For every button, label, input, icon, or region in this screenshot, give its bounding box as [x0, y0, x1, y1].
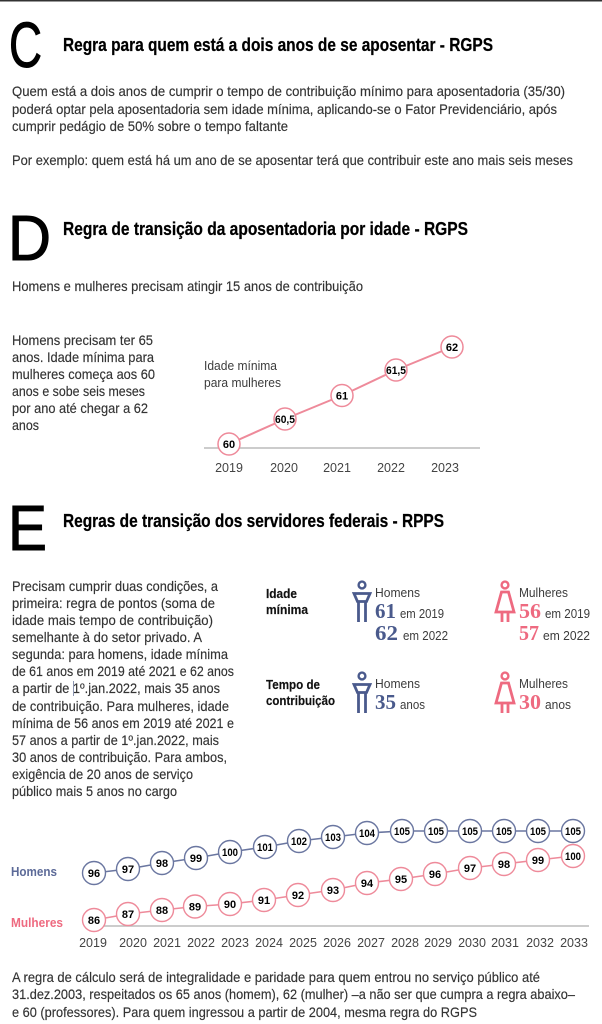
text block E: 57 anos a partir de 1º.jan.2022, mais — [12, 732, 219, 748]
series: mulheres: 96 — [429, 869, 441, 881]
text block E: de contribuição. Para mulheres, idade — [12, 698, 229, 714]
stats: homens idade — [375, 585, 448, 645]
series: homens: 101 — [257, 842, 273, 854]
text block D — [12, 332, 155, 433]
text block E: a partir de 1º.jan.2022, mais 35 anos — [12, 680, 220, 696]
stats: homens idade: Homens — [375, 585, 420, 600]
stats: homens contribuição: Homens — [375, 676, 420, 691]
row label: idade mínima: mínima — [266, 603, 309, 617]
stats: mulheres idade: 56 — [519, 599, 541, 623]
series: mulheres: 89 — [189, 902, 201, 914]
series: homens: 102 — [291, 836, 307, 848]
series: mulheres — [82, 844, 584, 932]
year axis labels: 2031 — [491, 936, 519, 950]
row label: tempo de contribuição: contribuição — [266, 694, 335, 708]
series: homens: 105 — [462, 826, 478, 838]
series: homens: 105 — [496, 826, 512, 838]
row label: idade mínima — [266, 587, 309, 617]
text block D: Homens precisam ter 65 — [12, 332, 153, 348]
series: mulheres: 95 — [395, 874, 407, 886]
series: mulheres: 94 — [361, 878, 374, 890]
text block C: Quem está a dois anos de cumprir o tempo de contribuição mínimo para aposentadoria (35/30) — [12, 83, 565, 99]
text block E — [12, 578, 234, 799]
series: mulheres: 99 — [532, 855, 544, 867]
line chart: idade mínima para mulheres: 2022 — [377, 461, 405, 475]
series: homens: 105 — [530, 826, 546, 838]
line chart: idade mínima para mulheres: 61,5 — [386, 365, 406, 377]
stats: homens idade: 62 — [375, 621, 398, 645]
year axis labels: 2033 — [560, 936, 588, 950]
text block C: cumprir pedágio de 50% sobre o tempo faltante — [12, 118, 288, 134]
series: homens: 104 — [359, 828, 376, 840]
series: mulheres: 88 — [156, 905, 168, 917]
text block D: anos — [12, 417, 39, 433]
text block E: público mais 5 anos no cargo — [12, 783, 177, 799]
series label: homens: Homens — [11, 865, 57, 879]
line chart: regra de pontos — [11, 820, 589, 950]
text block E: Precisam cumprir duas condições, a — [12, 578, 218, 594]
text block E: segunda: para homens, idade mínima — [12, 646, 228, 662]
series: mulheres: 100 — [565, 851, 581, 863]
text block: regra de cálculo: A regra de cálculo será de integralidade e paridade para quem entrou no serviço público até — [12, 969, 540, 985]
series: homens — [82, 820, 584, 884]
year axis labels: 2028 — [391, 936, 419, 950]
icon: mulher contribuição — [496, 673, 514, 713]
series: mulheres: 98 — [498, 859, 510, 871]
line chart: idade mínima para mulheres: 2020 — [270, 461, 298, 475]
year axis labels: 2020 — [119, 936, 147, 950]
stats: homens contribuição — [375, 676, 425, 714]
line chart: idade mínima para mulheres: 60 — [223, 439, 235, 451]
series: homens: 98 — [156, 858, 168, 870]
letter D: D — [8, 202, 51, 274]
text block E: semelhante à do setor privado. A — [12, 629, 203, 645]
heading C: Regra para quem está a dois anos de se aposentar - RGPS — [63, 35, 493, 55]
line chart: idade mínima para mulheres: 2019 — [215, 461, 243, 475]
series: mulheres: 86 — [88, 915, 100, 927]
stats: mulheres contribuição: anos — [545, 697, 571, 712]
icon: homem contribuição — [354, 673, 370, 713]
year axis labels: 2025 — [289, 936, 317, 950]
series: mulheres: 92 — [292, 890, 304, 902]
stats: mulheres contribuição — [519, 676, 571, 714]
year axis labels: 2027 — [357, 936, 385, 950]
text block: regra de cálculo: e 60 (professores). Para quem ingressou a partir de 2004, mesma regra do RGPS — [12, 1004, 477, 1020]
stats: mulheres idade: em 2022 — [543, 628, 590, 643]
year axis labels: 2022 — [187, 936, 215, 950]
line chart: idade mínima para mulheres: 62 — [446, 342, 458, 354]
text block E: mínima de 56 anos em 2019 até 2021 e — [12, 715, 234, 731]
year axis labels: 2021 — [153, 936, 181, 950]
panel: section C — [9, 9, 573, 168]
series: homens: 105 — [565, 826, 581, 838]
chart label — [204, 358, 281, 390]
series: homens: 100 — [222, 847, 238, 859]
series: mulheres: 87 — [122, 909, 134, 921]
year axis labels: 2023 — [221, 936, 249, 950]
year axis labels: 2026 — [323, 936, 351, 950]
series label: mulheres: Mulheres — [11, 916, 63, 930]
stats: mulheres idade: em 2019 — [545, 606, 590, 621]
heading D: Regra de transição da aposentadoria por idade - RGPS — [63, 219, 468, 239]
series: homens: 96 — [88, 868, 100, 880]
text block D: por ano até chegar a 62 — [12, 400, 148, 416]
intro D: Homens e mulheres precisam atingir 15 anos de contribuição — [12, 278, 363, 294]
text block E: exigência de 20 anos de serviço — [12, 766, 193, 782]
year axis labels: 2030 — [458, 936, 486, 950]
icon: mulher idade — [496, 582, 514, 622]
series: mulheres: 93 — [327, 885, 339, 897]
text block D: anos. Idade mínima para — [12, 349, 154, 365]
chart label: para mulheres — [204, 375, 281, 390]
series: homens: 105 — [428, 826, 444, 838]
text block D: mulheres começa aos 60 — [12, 366, 155, 382]
text block C: Por exemplo: quem está há um ano de se aposentar terá que contribuir este ano mais seis meses — [12, 152, 573, 168]
heading E: Regras de transição dos servidores federais - RPPS — [63, 511, 444, 531]
letter C: C — [9, 9, 42, 81]
line chart: idade mínima para mulheres — [204, 336, 480, 475]
text block E: primeira: regra de pontos (soma de — [12, 595, 215, 611]
text cursor mark — [73, 681, 74, 696]
stats: homens idade: em 2022 — [403, 628, 448, 643]
year axis labels — [79, 936, 588, 950]
text block D: anos e sobe seis meses — [12, 383, 145, 399]
panel: section D — [8, 202, 480, 475]
series: homens: 99 — [190, 853, 202, 865]
stats: homens idade: 61 — [375, 599, 396, 623]
stats: mulheres contribuição: Mulheres — [519, 676, 568, 691]
year axis labels: 2032 — [526, 936, 554, 950]
text block E: idade mais tempo de contribuição) — [12, 612, 213, 628]
stats: mulheres idade: Mulheres — [519, 585, 568, 600]
row label: idade mínima: Idade — [266, 587, 297, 601]
icon: homem idade — [354, 582, 370, 622]
series: mulheres: 90 — [224, 899, 236, 911]
row label: tempo de contribuição: Tempo de — [266, 678, 320, 692]
text block: regra de cálculo — [12, 969, 575, 1020]
text block C: poderá optar pela aposentadoria sem idade mínima, aplicando-se o Fator Previdenciário, após — [12, 101, 557, 117]
stats: homens idade: em 2019 — [400, 606, 444, 621]
year axis labels: 2019 — [79, 936, 107, 950]
stats: homens contribuição: anos — [400, 697, 425, 712]
row label: tempo de contribuição — [266, 678, 335, 708]
series: homens: 105 — [394, 826, 410, 838]
line chart: idade mínima para mulheres: 60,5 — [275, 414, 295, 426]
year axis labels: 2024 — [255, 936, 283, 950]
text block C — [12, 83, 573, 168]
series: homens: 97 — [122, 864, 134, 876]
series: mulheres: 91 — [258, 895, 270, 907]
stats: mulheres idade — [519, 585, 590, 645]
year axis labels: 2029 — [424, 936, 452, 950]
text block E: de 61 anos em 2019 até 2021 e 62 anos — [12, 663, 234, 679]
line chart: idade mínima para mulheres: 61 — [336, 390, 348, 402]
stats: mulheres idade: 57 — [519, 621, 539, 645]
text block E: 30 anos de contribuição. Para ambos, — [12, 749, 227, 765]
line chart: idade mínima para mulheres: 2021 — [323, 461, 351, 475]
line chart: idade mínima para mulheres: 2023 — [431, 461, 459, 475]
series: homens: 103 — [325, 832, 341, 844]
stats: mulheres contribuição: 30 — [519, 690, 541, 714]
series: mulheres: 97 — [464, 863, 476, 875]
panel: section E — [8, 492, 590, 1020]
letter E: E — [8, 492, 47, 564]
chart label: Idade mínima — [204, 358, 278, 373]
stats: homens contribuição: 35 — [375, 690, 396, 714]
